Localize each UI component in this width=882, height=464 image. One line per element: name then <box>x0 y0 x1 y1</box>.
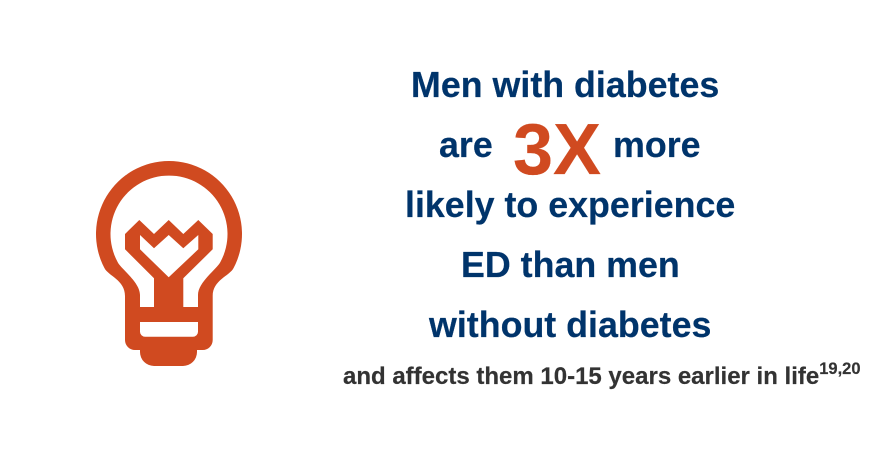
heading line: are: are <box>439 125 493 165</box>
heading line: more: more <box>613 125 701 165</box>
heading line: without diabetes: without diabetes <box>429 305 711 345</box>
text block: and affects them earlier in life: and affects them 10-15 years earlier in life19,20 <box>343 360 861 390</box>
highlight: 3X: 3X <box>513 110 601 190</box>
heading line: likely to experience: likely to experience <box>405 185 735 225</box>
heading line: Men with diabetes: Men with diabetes <box>411 65 719 105</box>
heading line: ED than men: ED than men <box>461 245 680 285</box>
